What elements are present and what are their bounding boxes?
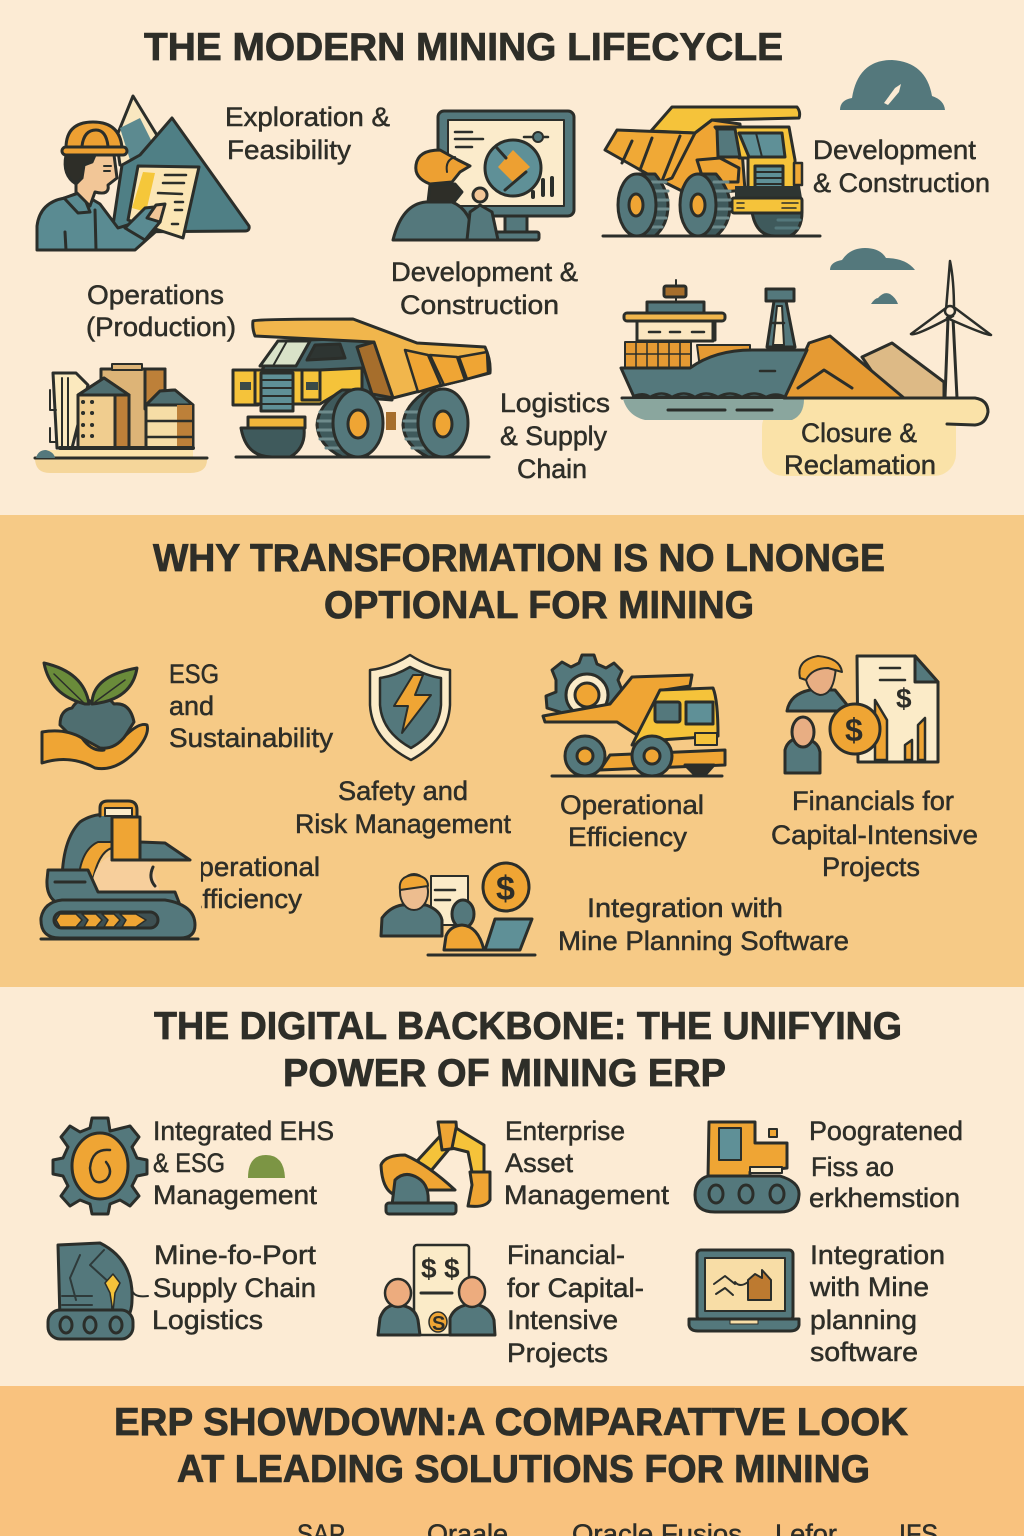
label: operational efficiency center: Efficiency: [568, 822, 688, 852]
label: mine to port supply chain logistics: Mine-fo-Port: [154, 1240, 317, 1270]
icon: people with laptop and dollar coin: [381, 863, 535, 955]
label: integration with mine planning software: planning: [810, 1305, 917, 1335]
label: integration with mine planning software (band): [558, 893, 849, 956]
heading: why transformation: OPTIONAL FOR MINING: [324, 584, 754, 627]
label: closure and reclamation: [784, 418, 936, 480]
label: logistics and supply chain: Chain: [517, 454, 587, 484]
icon: two people with dollar board: $: [421, 1253, 437, 1284]
icon: people with laptop and dollar coin: $: [496, 870, 515, 908]
label: operational efficiency left, clipped: Efficiency: [184, 884, 303, 914]
title: modern mining lifecycle: THE MODERN MINING LIFECYCLE: [144, 26, 783, 69]
label: operations production: [86, 280, 236, 342]
label: poogratened fiss ao erkhemstion: erkhemstion: [809, 1183, 960, 1213]
label: financial for capital-intensive projects: Financial-: [507, 1240, 625, 1270]
label: financial for capital-intensive projects: Intensive: [507, 1305, 618, 1335]
label: operations production: (Production): [86, 312, 236, 342]
label: poogratened fiss ao erkhemstion: Fiss ao: [811, 1152, 894, 1182]
icon: yellow dump truck facing left: [233, 319, 490, 457]
label: ESG and sustainability: ESG: [169, 659, 219, 689]
heading: digital backbone: POWER OF MINING ERP: [283, 1052, 726, 1095]
label: integration with mine planning software: [809, 1240, 945, 1367]
icon: gear: [53, 1118, 147, 1214]
label: mine to port supply chain logistics: Logistics: [152, 1305, 263, 1335]
icon: finance report with people: $: [896, 683, 912, 714]
heading: digital backbone: [154, 1005, 902, 1095]
icon: excavator arm: [381, 1122, 490, 1214]
label: safety and risk management: [295, 776, 511, 839]
icon: finance report with people: $: [845, 712, 863, 748]
label: mine to port supply chain logistics: [152, 1240, 317, 1335]
icon: bulldozer on tracks: [695, 1122, 799, 1212]
icon: finance report with people: [785, 656, 938, 773]
heading: digital backbone: THE DIGITAL BACKBONE: THE UNIFYING: [154, 1005, 902, 1048]
icon: laptop with planning map: [689, 1250, 799, 1331]
label: integration with mine planning software (band): Mine Planning Software: [558, 926, 849, 956]
icon: yellow dump truck facing right: [603, 107, 820, 236]
label: financial for capital-intensive projects: for Capital-: [507, 1273, 644, 1303]
label: operational efficiency center: Operational: [560, 790, 704, 820]
icon: seedling in hand: [42, 663, 148, 769]
label: integration with mine planning software (band): Integration with: [587, 893, 783, 923]
label: development and construction right: Development: [813, 135, 977, 165]
label: logistics and supply chain: & Supply: [500, 421, 607, 451]
label: mine to port supply chain logistics: Supply Chain: [153, 1273, 316, 1303]
label: development and construction right: [813, 135, 990, 198]
label: operations production: Operations: [87, 280, 224, 310]
label: enterprise asset management: Asset: [505, 1148, 573, 1178]
label: development and construction center: Development &: [391, 257, 578, 287]
table header: ERP vendors: [297, 1519, 938, 1536]
heading: ERP showdown: ERP SHOWDOWN:A COMPARATTVE LOOK: [114, 1401, 908, 1444]
label: integrated EHS and ESG management: Integrated EHS: [153, 1116, 334, 1146]
label: financials for capital-intensive projects (band): [771, 786, 978, 882]
icon: crawler excavator: [41, 801, 201, 939]
label: enterprise asset management: [504, 1116, 670, 1210]
label: ESG and sustainability: Sustainability: [169, 723, 334, 753]
label: financial for capital-intensive projects: Projects: [507, 1338, 608, 1368]
label: logistics and supply chain: [500, 388, 610, 484]
label: exploration and feasibility: [225, 102, 390, 165]
heading: why transformation: WHY TRANSFORMATION IS NO LNONGE: [153, 537, 885, 580]
label: exploration and feasibility: Feasibility: [227, 135, 352, 165]
label: integrated EHS and ESG management: [153, 1116, 334, 1210]
label: enterprise asset management: Enterprise: [505, 1116, 625, 1146]
label: integration with mine planning software: with Mine: [809, 1272, 929, 1302]
label: enterprise asset management: Management: [504, 1180, 670, 1210]
label: safety and risk management: Safety and: [338, 776, 468, 806]
heading: ERP showdown: [114, 1401, 908, 1491]
label: integrated EHS and ESG management: Management: [153, 1180, 318, 1210]
label: financials for capital-intensive projects (band): Financials for: [792, 786, 954, 816]
icon: ship tower hills and wind turbine: [621, 261, 991, 425]
heading: ERP showdown: AT LEADING SOLUTIONS FOR MINING: [177, 1448, 870, 1491]
icon: geologist with mountains and document: [37, 96, 249, 250]
icon: two people with dollar board: S: [432, 1313, 445, 1335]
label: financials for capital-intensive projects (band): Capital-Intensive: [771, 820, 978, 850]
label: development and construction right: & Construction: [813, 168, 990, 198]
icon: cloud with pen: [840, 60, 945, 110]
icon: gear and truck: [543, 655, 725, 776]
label: poogratened fiss ao erkhemstion: [809, 1116, 963, 1213]
icon: clouds right: [830, 248, 915, 304]
label: exploration and feasibility: Exploration &: [225, 102, 390, 132]
label: integration with mine planning software: software: [810, 1337, 918, 1367]
panel background: reclamation pad: [762, 405, 956, 476]
label: closure and reclamation: Reclamation: [784, 450, 936, 480]
label: financial for capital-intensive projects: [507, 1240, 644, 1368]
label: development and construction center: Construction: [400, 290, 559, 320]
icon: two people with dollar board: [378, 1245, 495, 1335]
label: integration with mine planning software: Integration: [810, 1240, 945, 1270]
label: operational efficiency left, clipped: Operational: [177, 852, 320, 882]
icon: mine conveyor: [48, 1243, 148, 1339]
label: operational efficiency center: [560, 790, 704, 852]
icon: processing plant: [35, 364, 207, 473]
label: poogratened fiss ao erkhemstion: Poogratened: [809, 1116, 963, 1146]
icon: worker at monitor: [393, 111, 574, 240]
label: safety and risk management: Risk Management: [295, 809, 511, 839]
label: ESG and sustainability: [169, 659, 334, 753]
label: integrated EHS and ESG management: & ESG: [153, 1148, 225, 1178]
label: development and construction center: [391, 257, 578, 320]
label: closure and reclamation: Closure &: [801, 418, 917, 448]
label: financials for capital-intensive projects (band): Projects: [822, 852, 920, 882]
label: operational efficiency left, clipped: [177, 852, 320, 914]
label: ESG and sustainability: and: [169, 691, 214, 721]
label: logistics and supply chain: Logistics: [500, 388, 610, 418]
icon: safety shield: [370, 655, 450, 760]
heading: why transformation: [153, 537, 885, 627]
icon: green mound: [248, 1155, 285, 1178]
icon: two people with dollar board: $: [444, 1253, 460, 1284]
